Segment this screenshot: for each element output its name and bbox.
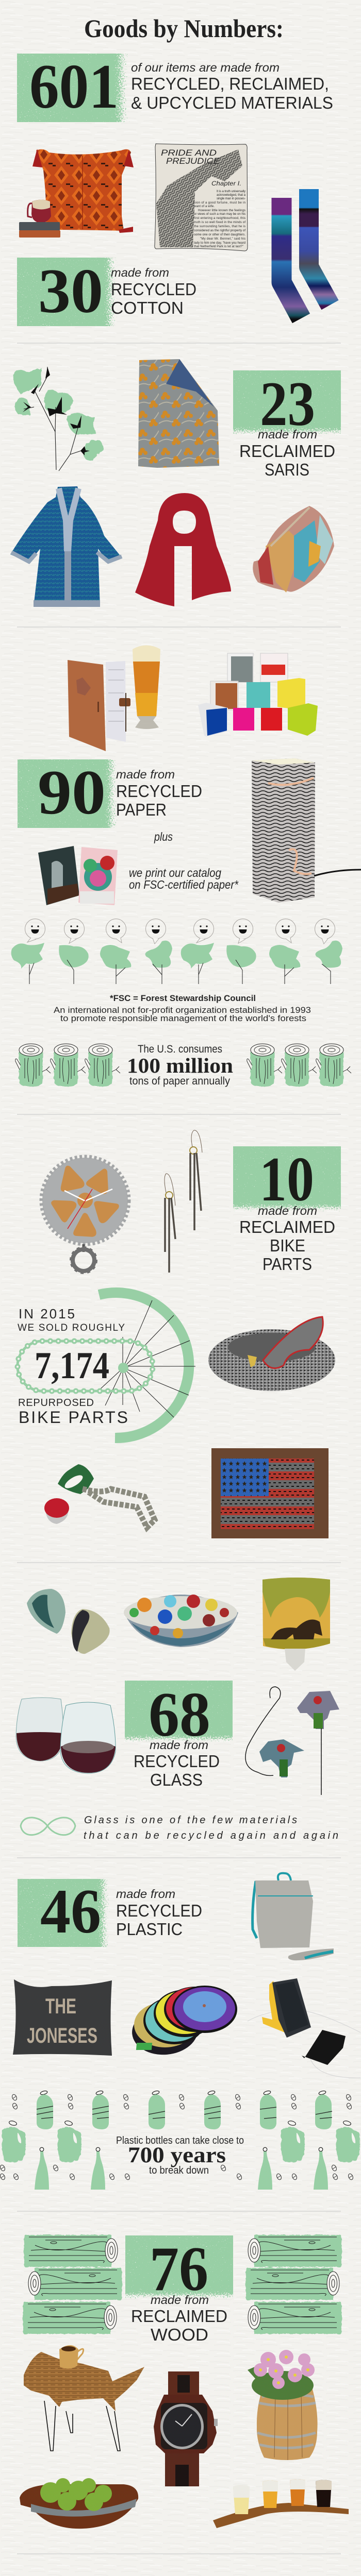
text: FSC definition (54, 993, 311, 1023)
product: Pride and Prejudice pillow (155, 144, 248, 251)
text: recycled glass: GLASS (150, 1770, 203, 1789)
product: beer flight on barrel stave (213, 2479, 349, 2528)
stat: 7,174 repurposed bike parts: WE SOLD ROUGHLY (18, 1323, 125, 1333)
stat: 100 million tons of paper: 100 million (127, 1054, 233, 1077)
panel: recycled paper (11, 645, 361, 1087)
product: red pillow with jug and books (19, 149, 134, 238)
text: FSC definition: An international not for-profit organization established in 1993 (54, 1005, 311, 1015)
stat block: 30: 30 (38, 256, 103, 326)
product: bike spoke earrings (165, 1130, 202, 1273)
panel: overall total (17, 51, 333, 318)
text: reclaimed wood (131, 2293, 227, 2344)
product: Pride and Prejudice pillow: want of a wife. (193, 205, 215, 208)
stat block: 46: 46 (40, 1876, 101, 1946)
product: Pride and Prejudice pillow: single man in posses- (217, 197, 245, 200)
stat: 100 million tons of paper: The U.S. consumes (138, 1043, 222, 1055)
product: patterned socks (282, 189, 330, 318)
product: bike chain American flag (211, 1448, 329, 1538)
product: Pride and Prejudice pillow: However little known the feelings (198, 209, 245, 212)
product: barrel planter with primrose (248, 2350, 318, 2460)
stat: 7,174 repurposed bike parts: REPURPOSED (18, 1397, 94, 1409)
text: recycled glass: made from (150, 1738, 208, 1752)
stat block: 68 (125, 1679, 233, 1750)
text: recycled glass: RECYCLED (134, 1752, 220, 1771)
title: Goods by Numbers: (84, 14, 284, 43)
product: red sari scarf (135, 493, 231, 606)
icon: happy tree 5 (181, 919, 214, 984)
text: recycled plastic: RECYCLED (116, 1901, 202, 1920)
product: hummingbird feeders (245, 1687, 339, 1795)
text: reclaimed saris: RECLAIMED (239, 442, 335, 461)
divider (17, 2553, 341, 2554)
panel: reclaimed bike parts (18, 1130, 341, 1538)
icon group: bottle pattern (0, 2090, 360, 2190)
text: reclaimed bike parts: made from (258, 1204, 317, 1217)
icon: happy tree 7 (269, 919, 300, 984)
stat: 7,174 repurposed bike parts: 7,174 (35, 1345, 109, 1387)
text: recycled paper: made from (116, 768, 175, 781)
divider (17, 2211, 341, 2212)
text: recycled, reclaimed, upcycled: of our items are made from (131, 61, 280, 74)
product: beer glass (133, 645, 160, 729)
icon: cotton plant (13, 367, 103, 471)
stat block: 68: 68 (149, 1679, 210, 1750)
text: recycled, reclaimed, upcycled (131, 61, 333, 112)
product: stemless wine glasses (16, 1698, 116, 1773)
product: Pride and Prejudice pillow: the surrounding families, that he is (194, 225, 245, 228)
stat block: 30 (17, 256, 124, 326)
text: recycled plastic (116, 1887, 202, 1939)
text: reclaimed wood: RECLAIMED (131, 2307, 227, 2326)
product: catalogs (38, 846, 118, 905)
text: FSC catalog note (129, 866, 239, 891)
product: solar phone charger (136, 1978, 360, 2078)
icon row: happy trees (11, 919, 342, 984)
product: Pride and Prejudice pillow: considered as the rightful property of (194, 229, 245, 232)
panel: reclaimed wood (20, 2233, 349, 2529)
stat: 7,174 repurposed bike parts: IN 2015 (19, 1306, 76, 1321)
product: patchwork sari bag (253, 506, 334, 592)
stat: 100 million tons of paper (127, 1043, 233, 1087)
text: reclaimed bike parts: BIKE (270, 1236, 305, 1255)
product: wave pattern lamp (252, 758, 361, 903)
divider (17, 626, 341, 628)
text: reclaimed wood: WOOD (151, 2325, 208, 2344)
text: recycled cotton: made from (111, 266, 169, 279)
stat block: 601: 601 (29, 51, 119, 122)
text: FSC definition: to promote responsible management of the world's forests (60, 1013, 306, 1023)
product: The Joneses pillow (13, 1979, 112, 2056)
icon group: logs right (245, 2235, 342, 2334)
text: recycled paper: RECYCLED (116, 782, 202, 801)
icon group: logs right (247, 1044, 351, 1087)
icon: happy tree 1 (11, 919, 45, 984)
stat block: 23 (233, 368, 341, 439)
product: Pride and Prejudice pillow: "My dear Mr. Bennet," said his (200, 238, 245, 241)
stat: 700 years: Plastic bottles can take close to (116, 2135, 244, 2146)
product: kantha folded corner (166, 359, 214, 407)
stat: 700 years (116, 2135, 244, 2176)
stat: 700 years: 700 years (128, 2143, 226, 2167)
text: glass fact: Glass is one of the few materials (84, 1815, 297, 1826)
product: The Joneses pillow: THE (45, 1994, 76, 2018)
icon row: caps (0, 2094, 354, 2180)
text: FSC catalog note: we print our catalog (129, 866, 221, 879)
panel: recycled cotton (17, 256, 196, 326)
product: wooden watch (154, 2371, 218, 2486)
product: Pride and Prejudice pillow: It is a truth universally (217, 190, 245, 193)
product: Pride and Prejudice pillow: PREJUDICE (166, 156, 220, 166)
stat block: 10 (233, 1144, 341, 1215)
text: recycled plastic: PLASTIC (116, 1920, 183, 1939)
product: kantha throw (138, 359, 219, 468)
panel: reclaimed saris (10, 359, 341, 607)
product: bike chain bowl with sunglasses (208, 1317, 335, 1391)
graphic: bike wheel (97, 1293, 195, 1438)
divider (17, 343, 341, 344)
product: blue sari robe (10, 486, 122, 607)
product: guitar picks (27, 1589, 110, 1654)
panel: recycled plastic (0, 1873, 360, 2190)
text: reclaimed saris: SARIS (265, 460, 309, 479)
icon row: bottles (37, 2090, 332, 2129)
product: Pride and Prejudice pillow: sion of a good fortune, must be in (194, 201, 245, 205)
divider (17, 1114, 341, 1115)
product: Pride and Prejudice pillow: some one or other of their daughters. (194, 233, 245, 236)
product: elephant night light (262, 1578, 330, 1671)
stat: 7,174 repurposed bike parts: BIKE PARTS (19, 1408, 128, 1427)
product: vinyl record coasters (130, 1986, 237, 2057)
text: glass fact: that can be recycled again and again (84, 1830, 338, 1841)
stat block: 46 (18, 1876, 117, 1947)
stat block: 23: 23 (260, 368, 315, 439)
icon: happy tree 4 (145, 919, 172, 984)
divider (17, 1562, 341, 1563)
stat block: 10: 10 (259, 1144, 314, 1214)
product: grey and teal backpack (253, 1873, 334, 1960)
text: recycled, reclaimed, upcycled: & UPCYCLED MATERIALS (131, 93, 333, 112)
divider (17, 1857, 341, 1858)
product: The Joneses pillow: JONESES (27, 2023, 97, 2047)
text: recycled cotton: RECYCLED (111, 280, 196, 299)
text: reclaimed wood: made from (151, 2293, 209, 2307)
text: reclaimed saris: made from (258, 428, 317, 441)
product: apple bowl (20, 2478, 138, 2529)
text: recycled, reclaimed, upcycled: RECYCLED, RECLAIMED, (131, 74, 329, 93)
text: recycled cotton: COTTON (111, 298, 184, 317)
product: table topics cubes (198, 653, 318, 737)
panel: recycled glass (16, 1578, 339, 1841)
text: recycled plastic: made from (116, 1887, 175, 1901)
text: recycled glass (134, 1738, 220, 1789)
text: reclaimed bike parts (239, 1204, 335, 1274)
product: Pride and Prejudice pillow: that Netherfield Park is let at last?" (194, 245, 243, 248)
product: bike chain bottle opener (44, 1464, 155, 1528)
product: Pride and Prejudice pillow: truth is so well fixed in the minds of (194, 221, 245, 224)
text: FSC catalog note: on FSC-certified paper* (129, 878, 239, 891)
icon group: logs left (23, 2235, 122, 2334)
product: Pride and Prejudice pillow: lady to him one day, "have you heard (194, 242, 245, 245)
icon row: slim bottles (35, 2147, 328, 2190)
product: leather notebook (68, 660, 130, 751)
text: recycled paper: PAPER (116, 800, 167, 819)
icon: happy tree 3 (100, 919, 131, 984)
stat block: 90 (18, 757, 125, 828)
product: Pride and Prejudice pillow: first entering a neighbourhood, this (194, 217, 245, 220)
icon: happy tree 6 (226, 919, 256, 984)
stat block: 76 (125, 2233, 233, 2304)
graphic: bike chain frame (18, 1341, 153, 1391)
stat: 100 million tons of paper: tons of paper annually (129, 1075, 230, 1087)
icon: happy tree 2 (59, 919, 89, 984)
product: sprocket clock (41, 1157, 129, 1273)
product: Pride and Prejudice pillow: PRIDE AND (161, 148, 217, 158)
stat block: 76: 76 (150, 2233, 208, 2304)
icon: happy tree 8 (315, 919, 342, 984)
text: glass fact (84, 1815, 338, 1841)
stat: 7,174 repurposed bike parts (18, 1306, 128, 1427)
product: Pride and Prejudice pillow: or views of such a man may be on his (194, 213, 245, 216)
product: Pride and Prejudice pillow: acknowledged, that a (217, 194, 246, 197)
text: FSC definition: *FSC = Forest Stewardship Council (110, 993, 256, 1003)
text: recycled paper (116, 768, 202, 819)
text: recycled cotton (111, 266, 196, 317)
product: recycled glass bowl (124, 1595, 238, 1647)
text: reclaimed bike parts: PARTS (262, 1255, 312, 1274)
product: USA reclaimed wood table with cup (24, 2345, 144, 2451)
icon row: jugs (2, 2120, 360, 2162)
text: reclaimed saris (239, 428, 335, 479)
stat: 700 years: to break down (149, 2165, 209, 2176)
product: Pride and Prejudice pillow: Chapter I. (211, 180, 241, 187)
text: plus: plus (154, 830, 173, 843)
stat block: 90: 90 (38, 757, 106, 827)
icon: infinity (21, 1818, 75, 1835)
icon group: logs left (15, 1044, 120, 1087)
text: reclaimed bike parts: RECLAIMED (239, 1217, 335, 1236)
